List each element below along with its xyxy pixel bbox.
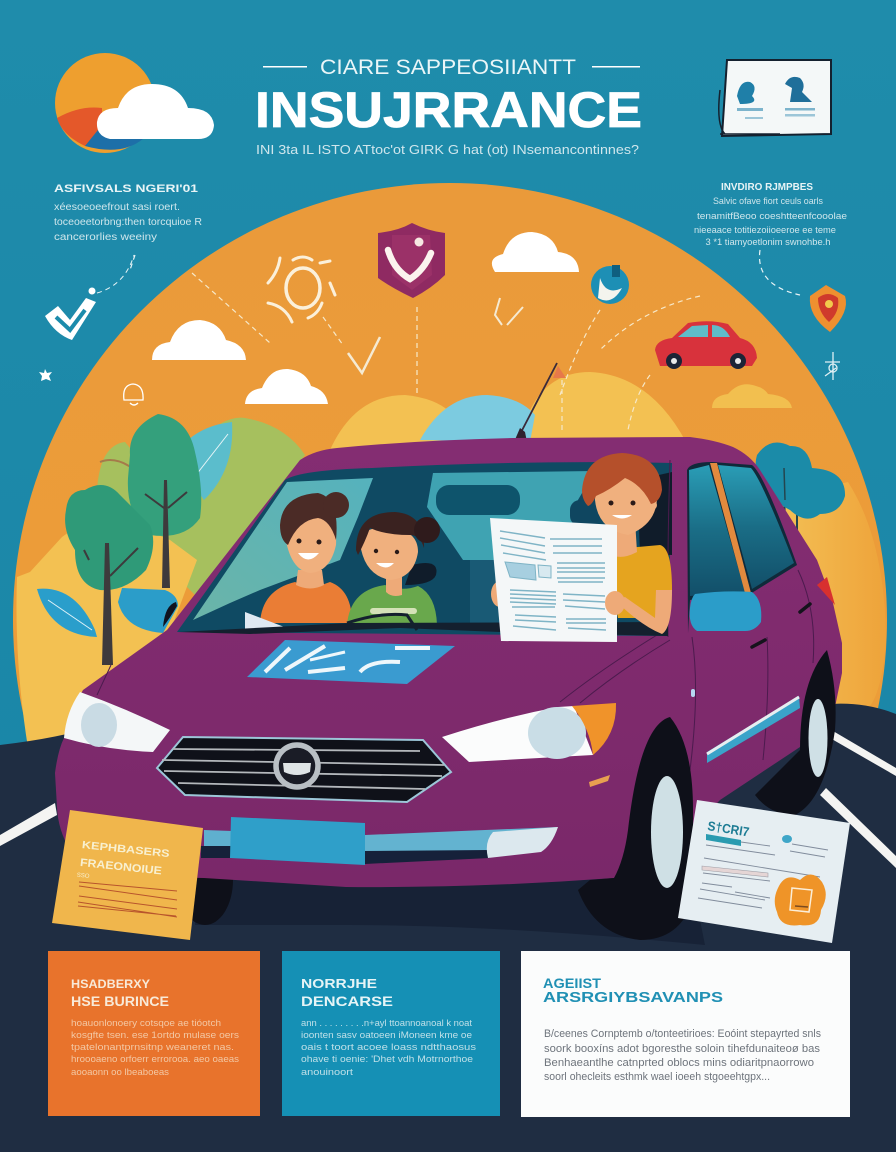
panel: white card: [521, 951, 850, 1117]
orange seal: [775, 874, 826, 925]
icon: location badge: [810, 285, 846, 332]
panel: white card: AGEIIST: [543, 976, 602, 991]
hood sticker: [247, 640, 455, 684]
bumper strip: [201, 827, 558, 864]
icon: document board top right: [719, 60, 831, 136]
panel: blue card: ohave ti oenie: 'Dhet vdh Motrnorthoe: [301, 1054, 473, 1065]
cloud lower: [245, 369, 328, 404]
blue leaf behind trees: [188, 422, 232, 500]
adult hand on form: [605, 591, 625, 615]
panel: blue card: [282, 951, 500, 1116]
yellow sticky note: [52, 810, 203, 940]
subtitle: INI 3ta IL ISTO ATtoc'ot GIRK G hat (ot) INsemancontinnes?: [256, 143, 639, 157]
panel: orange card: hroooaeno orfoerr errorooa. aeo oaeas: [71, 1054, 239, 1065]
eyebrow heading: CIARE SAPPEOSIIANTT: [320, 56, 576, 79]
tree rear left: [100, 414, 201, 588]
panel: orange card: aooaonn oo lbeaboeas: [71, 1067, 169, 1078]
icon: sun and cloud top left: [55, 53, 214, 153]
small marker: [691, 689, 695, 697]
icon: gear sun outline: [268, 257, 335, 322]
dashed connector left: [97, 255, 134, 293]
text block: left note: [54, 183, 202, 243]
yellow sticky note: SSO: [76, 873, 90, 880]
hood crease: [97, 665, 111, 695]
windshield centre glass: [427, 471, 595, 560]
text block: right note: tenamitfBeoo coeshtteenfcooolae: [697, 211, 847, 222]
text block: right note: 3 *1 tiamyoetlonim swnohbe.h: [706, 237, 830, 248]
left mirror: [118, 588, 178, 633]
background hills: [16, 372, 686, 748]
text block: left note: cancerorlies weeiny: [54, 232, 157, 243]
leaf left: [37, 589, 97, 637]
icon: small figure: [825, 352, 840, 380]
antenna: [514, 363, 566, 442]
side mirror: [690, 591, 761, 631]
panel: orange card: hoauonlonoery cotsqoe ae tióotch: [71, 1018, 221, 1029]
text block: right note: INVDIRO RJMPBES: [721, 181, 813, 193]
tree right: [756, 443, 845, 555]
text block: left note: ASFIVSALS NGERI'01: [54, 183, 198, 195]
text block: right note: [694, 181, 847, 248]
icon: small star left: [39, 369, 52, 381]
icon: red car: [655, 321, 757, 369]
car: [55, 437, 842, 940]
door lines: [560, 460, 814, 770]
panel: blue card: ioonten sasv oatoeen iMoneen kme oe: [301, 1030, 472, 1041]
dashed connectors: [130, 250, 800, 430]
left headlight: [64, 692, 170, 752]
panel: blue card: DENCARSE: [301, 993, 393, 1009]
yellow sticky note: FRAEONOIUE: [79, 857, 162, 877]
text block: right note: Salvic ofave fiort ceuls oarls: [713, 196, 823, 207]
car body: [55, 437, 842, 887]
icon: bell outline: [124, 384, 143, 405]
side window: [687, 462, 797, 633]
panel: orange card: [48, 951, 260, 1116]
headrest behind adult: [570, 500, 600, 526]
panel: white card: ARSRGIYBSAVANPS: [543, 990, 723, 1006]
panel: blue card: anouinoort: [301, 1067, 353, 1078]
rear seat panels: [470, 560, 500, 623]
panel: blue card: ann . . . . . . . . .n+ayl ttoannoanoal k noat: [301, 1018, 472, 1029]
windshield left glass: [193, 478, 373, 620]
panel: orange card: tpatelonantprnsitnp weaneret nas.: [71, 1042, 234, 1053]
yellow sticky note: KEPHBASERS: [81, 839, 170, 860]
icon: small arrows: [495, 298, 523, 325]
panel: white card: Benhaeantlhe catnprted oblocs mins odiaritpnaorrowo: [544, 1057, 814, 1069]
panel: white card: B/ceenes Cornptemb o/tonteetirioes: Eoóint stepayrted snls: [544, 1028, 821, 1040]
plate: [230, 817, 365, 865]
icon: check mark: [348, 337, 380, 373]
grille: [157, 737, 451, 802]
icon: check badge left: [45, 288, 96, 340]
left child: [260, 492, 352, 623]
panel: orange card: kosgfte tsen. ese 1ortdo mulase oers: [71, 1030, 239, 1041]
panel: blue card: oais t toort acoee loass ndtthaosus: [301, 1042, 476, 1053]
rear view mirror: [436, 485, 520, 515]
panel: white card: soorl ohecleits esthmk wael ioeeh stgoeehtgpx...: [544, 1071, 770, 1083]
certificate document: [678, 800, 850, 943]
sun circle backdrop: [13, 183, 887, 1057]
door stripe: [707, 696, 800, 763]
panel: blue card: NORRJHE: [301, 977, 377, 991]
cloud centre top: [492, 232, 579, 272]
adult holding form: [491, 453, 672, 634]
title: INSUJRRANCE: [255, 82, 642, 138]
dashboard and wiper: [178, 612, 668, 636]
tree front left: [65, 485, 153, 665]
text block: right note: nieeaace totitiezoiioeeroe ee teme: [694, 225, 836, 236]
door handles: [752, 604, 810, 647]
policy form: [490, 518, 617, 642]
windshield interior: [177, 462, 672, 636]
icon: blue balloon pin: [591, 265, 629, 304]
panel: white card: soork booxíns adot bgoresthe soloin tihefdunaiteoø bas: [544, 1043, 821, 1055]
middle child: [347, 512, 440, 625]
icon: shield: [378, 223, 445, 298]
text block: left note: toceoeetorbng:then torcquioe R: [54, 217, 202, 228]
panel: orange card: HSE BURINCE: [71, 994, 169, 1009]
left front wheel: [177, 835, 233, 925]
right headlight: [442, 703, 616, 762]
dark seat behind adult: [637, 472, 672, 555]
text block: left note: xéesoeoeefrout sasi roert.: [54, 202, 180, 213]
cloud left: [152, 320, 246, 360]
road: [0, 704, 896, 1152]
certificate document: S†CRI7: [707, 818, 750, 840]
near wheel: [578, 717, 693, 940]
right rear wheel: [755, 650, 836, 815]
tail light: [817, 577, 835, 605]
yellow cloud: [712, 384, 792, 408]
panel: orange card: HSADBERXY: [71, 977, 150, 991]
